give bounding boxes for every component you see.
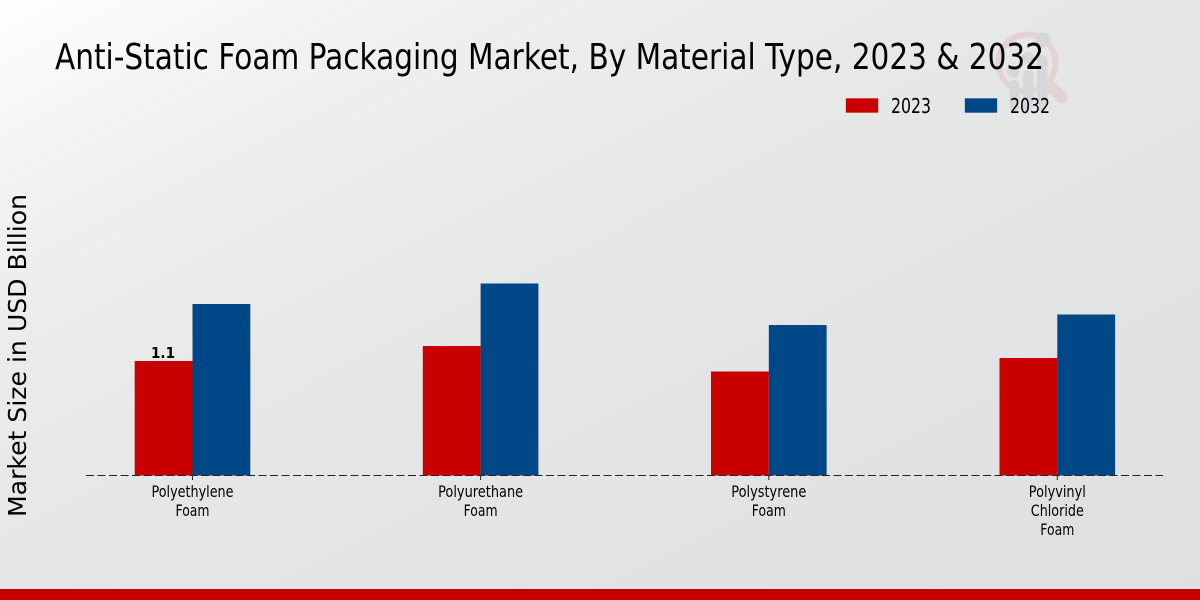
- legend label 2032: 2032: [1010, 94, 1050, 118]
- x axis baseline: [86, 475, 1163, 480]
- group: Polyethylene Foam: [135, 304, 250, 476]
- category label: Polyethylene Foam: Foam: [176, 501, 210, 520]
- group: Polyurethane Foam: [423, 284, 538, 476]
- group: Polystyrene Foam: [711, 325, 827, 476]
- legend swatch 2023: [846, 98, 878, 113]
- legend label 2023: 2023: [891, 94, 931, 118]
- icon: watermark logo: [998, 32, 1062, 111]
- category label: Polyethylene Foam: [152, 482, 234, 520]
- bar chart: [135, 284, 1115, 476]
- category label: Polyvinyl Chloride Foam: [1029, 482, 1086, 539]
- category label: Polyvinyl Chloride Foam: Foam: [1040, 520, 1074, 539]
- category label: Polyvinyl Chloride Foam: Chloride: [1031, 501, 1084, 520]
- category label: Polystyrene Foam: Foam: [752, 501, 786, 520]
- legend: [846, 94, 1050, 118]
- category label: Polystyrene Foam: Polystyrene: [731, 482, 806, 501]
- legend swatch 2032: [964, 98, 998, 113]
- category label: Polyurethane Foam: Polyurethane: [438, 482, 523, 501]
- category label: Polyurethane Foam: Foam: [464, 501, 498, 520]
- group: Polyvinyl Chloride Foam: [1000, 314, 1115, 476]
- category label: Polyurethane Foam: [438, 482, 523, 520]
- category label: Polyethylene Foam: Polyethylene: [152, 482, 234, 501]
- category label: Polyvinyl Chloride Foam: Polyvinyl: [1029, 482, 1086, 501]
- data label: 1.1: [151, 344, 175, 362]
- footer bar: [0, 589, 1200, 600]
- y axis title: Market Size in USD Billion: [3, 194, 32, 517]
- category label: Polystyrene Foam: [731, 482, 806, 520]
